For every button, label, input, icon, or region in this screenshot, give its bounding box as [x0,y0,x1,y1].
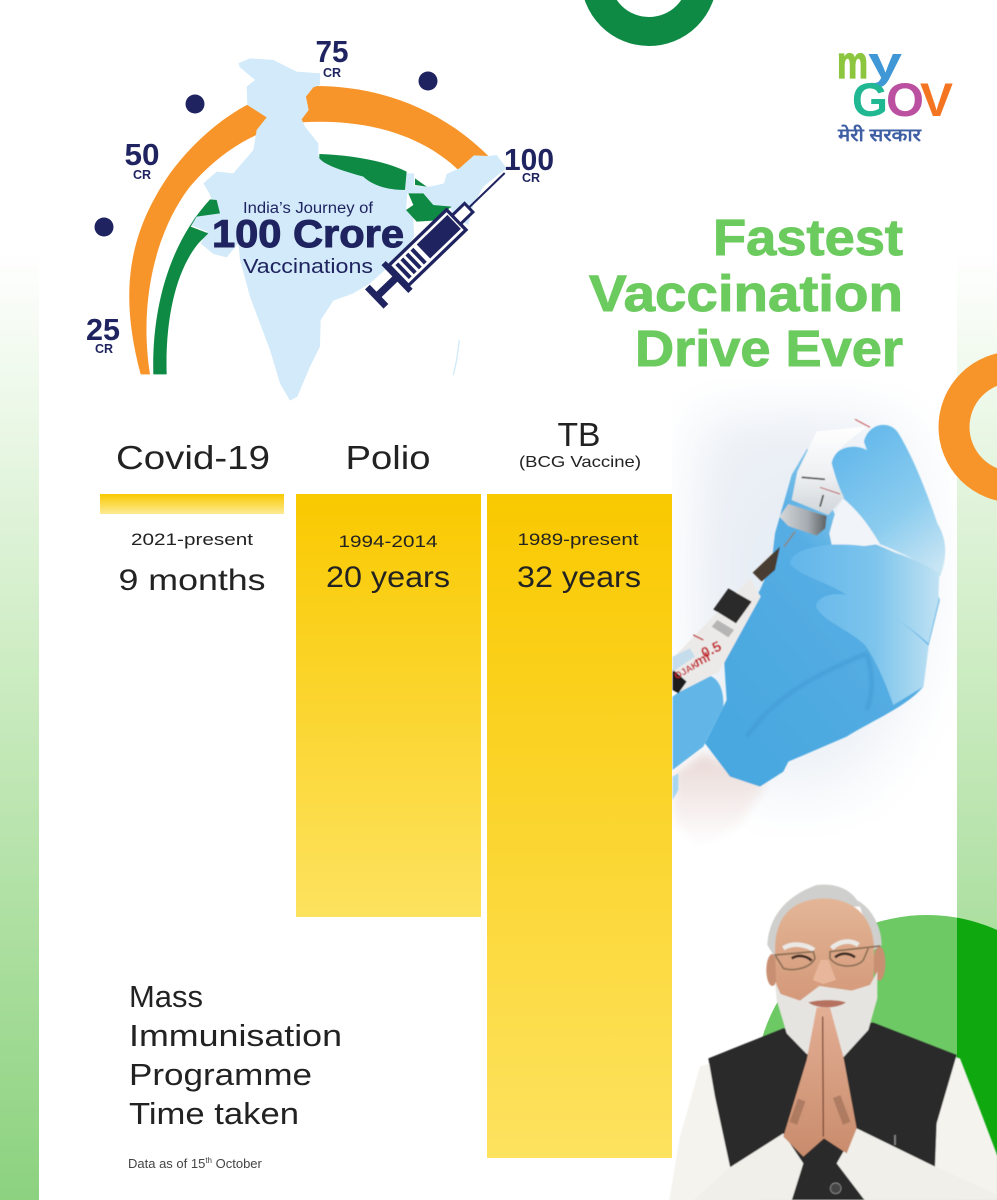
footnote: th [205,1156,212,1165]
caption: programme time taken: Programme [129,1057,312,1092]
face [775,898,874,1030]
palm crease [747,653,872,737]
ring finger [864,425,945,577]
milestone: 75 CR: CR [323,66,341,80]
barrel base [673,669,687,693]
ring: top green [596,0,702,32]
column heading: Polio: Polio [346,439,430,476]
bar: Polio [296,494,481,917]
sleeve left [693,1133,803,1200]
syringe hub [753,547,780,582]
index finger [790,545,939,643]
title: Vaccination [589,265,903,322]
bar: TB [487,494,672,1158]
values: Polio: 20 years [326,561,450,594]
title: Drive Ever [635,320,903,377]
mouth [808,1000,846,1007]
label: 100 Crore: 100 Crore [212,213,404,256]
logo: MyGov: V [920,73,954,126]
milestone: 25 CR: CR [95,342,113,356]
logo: MyGov: y [868,37,902,88]
values: TB: 32 years [517,561,641,594]
footnote: October [212,1156,263,1171]
column heading: TB [519,416,641,471]
milestone: 75 CR: 75 [316,34,348,69]
label: Vaccinations: Vaccinations [243,256,373,278]
vest [708,1023,957,1200]
hair [767,885,882,957]
milestone: 50 CR: 50 [124,137,160,172]
logo: MyGov: m [837,37,868,88]
title [589,209,903,377]
middle lower finger [816,594,929,705]
caption: programme time taken: Immunisation [129,1018,342,1053]
column heading: TB: (BCG Vaccine) [519,454,641,471]
caption: programme time taken: Mass [129,979,203,1014]
vial body [792,427,867,515]
logo: MyGov: O [886,73,924,126]
nose [813,960,836,984]
values: Covid-19 [118,530,266,597]
logo: MyGov: मेरी सरकार [837,124,922,145]
haze behind hand photo [686,408,911,794]
values: Covid-19: 2021-present [131,530,253,549]
arc: orange [129,86,491,374]
column heading: TB: TB [558,416,600,453]
values: Polio [326,532,450,594]
graphic: India map with milestone arcs [86,34,554,401]
wrist [672,752,768,829]
dose markings: 0.5 [699,639,724,662]
values: TB: 1989-present [518,530,639,549]
praying hands [783,1007,857,1157]
values: Polio: 1994-2014 [338,532,438,551]
vial cap [779,504,827,536]
milestone: 100 CR: 100 [504,142,554,177]
island outline [453,340,459,375]
logo: MyGov: G [852,73,888,126]
values: TB [517,530,641,594]
ear left [766,954,778,986]
milestone dots [94,72,438,236]
values: Covid-19: 9 months [118,564,266,597]
eyes [792,954,855,961]
title: Fastest [713,209,903,266]
label: India's Journey: India’s Journey of [243,200,374,217]
gap between fingers [829,499,879,547]
column heading: Covid-19: Covid-19 [116,439,270,476]
caption: programme time taken: Time taken [129,1096,299,1131]
milestone: 25 CR: 25 [86,312,120,347]
ring: right orange [954,367,997,487]
map: India [191,58,507,401]
arc: green [153,154,452,374]
footnote: Data as of 15 [128,1156,205,1171]
ear right [873,946,885,981]
lower thumb [673,773,678,800]
portrait [669,885,997,1200]
button [830,1183,841,1194]
middle finger [831,446,880,544]
glasses [775,946,880,970]
bar: Covid-19 [100,494,284,514]
glove palm [705,448,940,787]
pen [892,1135,897,1145]
sleeve right [837,1128,997,1200]
beard [775,972,877,1057]
green circle behind portrait [755,915,997,1200]
needle [784,532,795,547]
caption: programme time taken [129,979,342,1131]
logo: MyGov [837,37,954,145]
kurta [669,1037,997,1200]
thumb [673,675,723,770]
syringe barrel [673,578,761,693]
dose markings: ml [692,649,712,669]
piston [713,588,752,623]
dose markings: OJAK [673,659,700,681]
photo: gloved hand with vial and syringe [673,419,945,847]
icon: syringe [361,159,518,313]
milestone: 100 CR: CR [522,171,540,185]
label patch [673,648,695,672]
eyebrows [783,942,858,950]
milestone: 50 CR: CR [133,168,151,182]
dose markings [674,640,722,679]
